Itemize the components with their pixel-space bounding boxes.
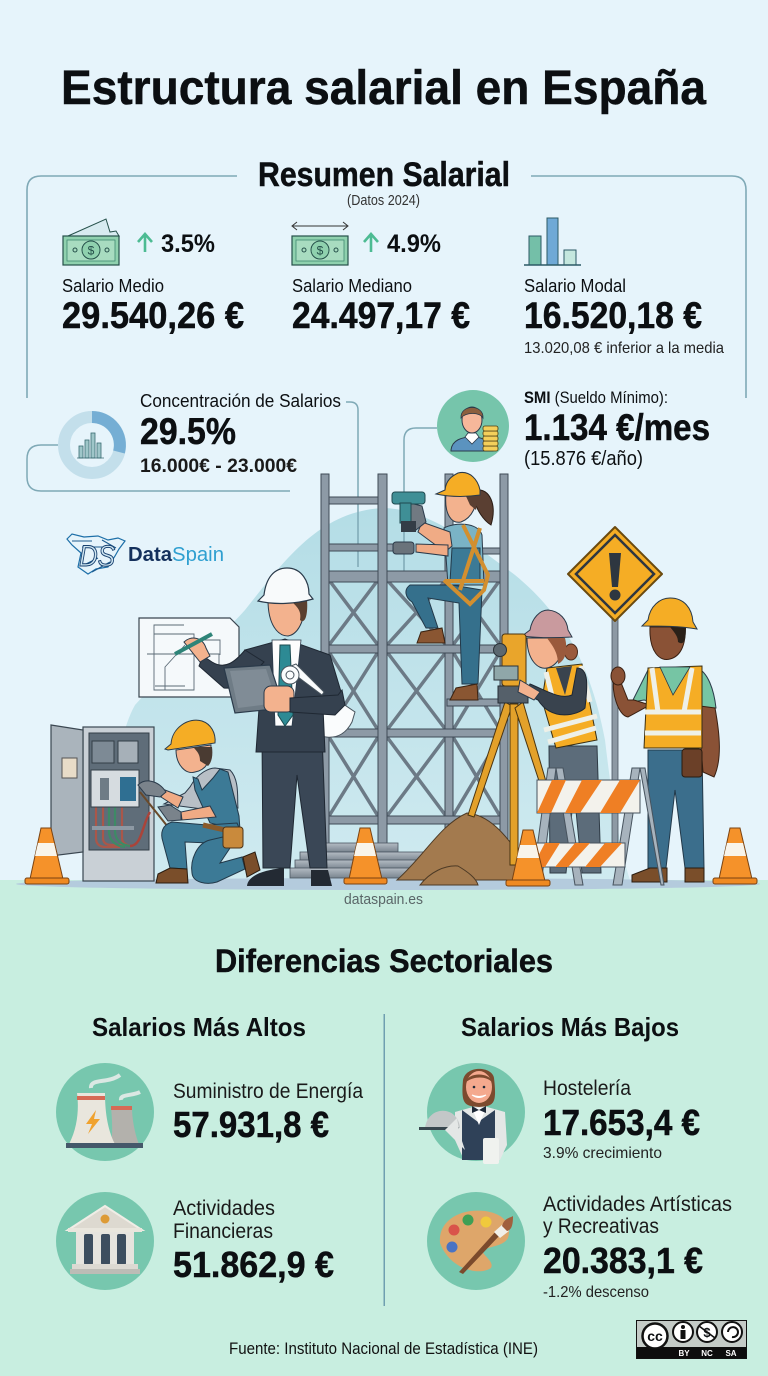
sector: actividades artisticas	[427, 1192, 732, 1301]
label: Actividades	[173, 1197, 275, 1220]
cone 1	[25, 828, 69, 884]
icon: power plant	[56, 1063, 154, 1161]
value: 16.520,18 €	[524, 295, 702, 336]
column divider	[384, 1014, 385, 1306]
background upper	[0, 0, 768, 882]
label: Actividades Artísticas	[543, 1193, 732, 1216]
scaffold	[321, 474, 508, 850]
value: 57.931,8 €	[173, 1104, 329, 1145]
person: flagger	[611, 598, 719, 882]
person: surveyor	[468, 610, 601, 873]
illustration hill	[112, 508, 630, 880]
arrow up	[138, 234, 152, 252]
person: engineer	[175, 568, 355, 886]
subheading: salarios bajos: Salarios Más Bajos	[461, 1012, 679, 1042]
panel frame	[27, 176, 746, 398]
value: 1.134 €/mes	[524, 407, 710, 448]
icon: palette and brush	[427, 1192, 525, 1290]
dirt pile	[397, 813, 526, 885]
person: worker with drill	[392, 472, 493, 700]
icon: waiter	[419, 1063, 525, 1164]
label: Hostelería	[543, 1077, 631, 1100]
license badge: SA	[725, 1349, 737, 1358]
background lower band	[0, 880, 768, 1376]
blueprint	[139, 618, 239, 697]
annual value: (15.876 €/año)	[524, 448, 643, 470]
icon: banknote with width arrow	[292, 222, 348, 265]
logo mark	[67, 534, 125, 574]
license badge: cc	[647, 1328, 663, 1344]
note: 13.020,08 € inferior a la media	[524, 340, 724, 357]
source: Fuente: Instituto Nacional de Estadística (INE)	[229, 1339, 538, 1358]
value: 3.5%: 3.5%	[161, 230, 215, 258]
logo: DataSpain	[67, 534, 224, 574]
person: electrician	[138, 720, 260, 883]
icon: banknotes	[63, 219, 119, 265]
sector: suministro de energia	[56, 1063, 363, 1161]
stat: salario medio	[62, 219, 244, 336]
decline note: -1.2% descenso	[543, 1284, 649, 1301]
cone 2	[344, 828, 387, 884]
label: SMI (Sueldo Mínimo):	[524, 388, 668, 407]
label line 2: y Recreativas	[543, 1215, 659, 1238]
label: Concentración de Salarios	[140, 391, 341, 411]
ground shadow	[16, 878, 760, 890]
logo wordmark: DataSpain	[128, 544, 224, 566]
warning sign	[568, 527, 662, 850]
logo mark: DS	[79, 540, 115, 573]
icon: bank building	[56, 1192, 154, 1290]
icon: banknote with width arrow: $	[317, 244, 324, 258]
connector lines	[27, 402, 358, 567]
panel: SMI	[404, 388, 710, 572]
barricade	[532, 768, 664, 885]
value: 29.540,26 €	[62, 295, 244, 336]
license badge: $	[703, 1325, 711, 1340]
title: Estructura salarial en España	[61, 62, 706, 115]
sector: actividades financieras	[56, 1192, 334, 1290]
growth note: 3.9% crecimiento	[543, 1145, 662, 1162]
illustration: construction scene	[16, 472, 760, 890]
traffic cones	[25, 828, 757, 886]
value: 24.497,17 €	[292, 295, 470, 336]
heading: resumen salarial: Resumen Salarial	[258, 156, 510, 194]
range: 16.000€ - 23.000€	[140, 456, 297, 477]
label line 2: Financieras	[173, 1220, 273, 1243]
heading: Diferencias Sectoriales	[215, 943, 553, 979]
connector line	[404, 428, 437, 572]
value: 51.862,9 €	[173, 1244, 334, 1285]
label: Salario Modal	[524, 276, 626, 296]
pipes stack	[290, 843, 438, 878]
stat: salario mediano	[292, 222, 470, 336]
panel: concentracion de salarios	[27, 391, 358, 567]
panel: resumen salarial	[27, 156, 746, 398]
electrical panel	[51, 725, 154, 881]
sector: hosteleria	[419, 1063, 700, 1164]
icon: bar chart	[524, 218, 581, 265]
label: Suministro de Energía	[173, 1080, 363, 1103]
panel: diferencias sectoriales	[56, 943, 732, 1306]
value: 17.653,4 €	[543, 1102, 700, 1143]
value: 29.5%	[140, 411, 236, 452]
subheading: salarios altos: Salarios Más Altos	[92, 1012, 306, 1042]
cone 3	[506, 830, 550, 886]
license badge	[636, 1320, 746, 1358]
license badge: BY	[678, 1349, 690, 1358]
value: 4.9%: 4.9%	[387, 230, 441, 258]
icon: banknotes: $	[88, 244, 95, 258]
subheading: datos 2024: (Datos 2024)	[347, 192, 420, 209]
stat: salario modal	[524, 218, 724, 357]
icon: donut chart	[64, 417, 120, 473]
label: Salario Medio	[62, 276, 164, 296]
website label: dataspain.es	[344, 891, 423, 908]
icon: person with coins	[437, 390, 509, 462]
arrow up	[364, 234, 378, 252]
license badge: NC	[701, 1349, 713, 1358]
value: 20.383,1 €	[543, 1240, 703, 1281]
cone 4	[713, 828, 757, 884]
label: Salario Mediano	[292, 276, 412, 296]
